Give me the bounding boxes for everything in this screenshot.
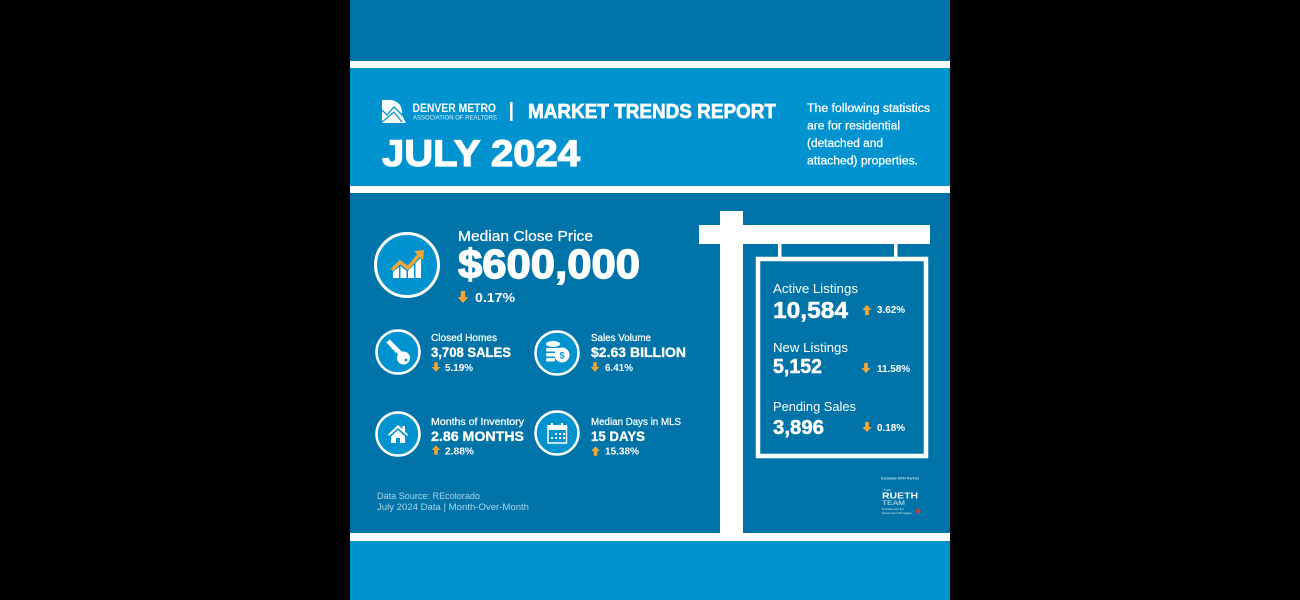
stat: sales volume — [536, 332, 686, 374]
new listings — [773, 340, 910, 378]
label: Sales Volume — [591, 333, 651, 344]
partner logo: Exclusive MTR Partner — [881, 476, 920, 480]
icon: Denver Metro logo — [381, 100, 406, 123]
label: Median Close Price — [458, 228, 593, 245]
text block: scope note — [807, 103, 930, 168]
icon: key — [376, 330, 420, 374]
pending sales: Pending Sales — [773, 399, 856, 414]
icon: down arrow — [591, 362, 599, 372]
new listings: 5,152 — [773, 356, 822, 378]
stat: closed homes — [376, 330, 511, 374]
pending sales: 0.18% — [877, 423, 905, 434]
change: 5.19% — [445, 363, 473, 374]
icon: up arrow — [591, 446, 600, 456]
change: 2.88% — [445, 446, 474, 458]
text block: scope note: (detached and — [807, 138, 883, 150]
active listings — [773, 281, 905, 323]
active listings: 10,584 — [773, 297, 848, 323]
text block: scope note: attached) properties. — [807, 156, 918, 168]
change: 15.38% — [605, 446, 639, 458]
divider — [510, 102, 513, 121]
text block: data source — [377, 491, 529, 513]
new listings: 11.58% — [877, 364, 910, 375]
text block: data source: July 2024 Data | Month-Over-Month — [377, 502, 529, 513]
logo wordmark: DENVER METRO — [412, 101, 496, 115]
label: Closed Homes — [431, 333, 497, 344]
icon: up arrow — [432, 445, 440, 455]
value: 15 DAYS — [591, 429, 645, 444]
partner logo: Powered by — [882, 507, 905, 511]
logo wordmark: ASSOCIATION OF REALTORS — [413, 114, 497, 122]
value: 2.86 MONTHS — [431, 429, 524, 444]
icon: down arrow — [432, 362, 440, 372]
partner logo: THE — [883, 488, 891, 492]
stat: median days in MLS — [536, 412, 681, 458]
sign post — [699, 211, 930, 533]
partner logo: RUETH — [882, 490, 918, 500]
change: 6.41% — [605, 363, 633, 374]
text block: scope note: The following statistics — [807, 103, 930, 115]
header band — [381, 100, 930, 174]
icon: coins — [536, 332, 578, 374]
new listings: New Listings — [773, 340, 849, 355]
partner logo: Movement Mortgage — [882, 511, 912, 515]
label: Months of Inventory — [431, 417, 524, 428]
icon: calendar — [536, 412, 578, 454]
icon: coins: $ — [559, 350, 565, 360]
pending sales — [773, 399, 905, 439]
change: 0.17% — [475, 290, 515, 305]
value: 3,708 SALES — [431, 345, 511, 360]
panel: listings sign — [758, 259, 926, 456]
text block: data source: Data Source: REcolorado — [377, 491, 480, 502]
value: $600,000 — [458, 241, 640, 287]
active listings: 3.62% — [877, 305, 905, 316]
heading: month: JULY 2024 — [382, 132, 580, 174]
value: $2.63 BILLION — [591, 345, 686, 360]
label: Median Days in MLS — [591, 417, 681, 428]
partner logo — [881, 476, 920, 515]
icon: house — [376, 412, 420, 456]
stat: months of inventory — [376, 412, 524, 458]
heading: report name: MARKET TRENDS REPORT — [528, 100, 776, 123]
icon: rising chart — [376, 234, 438, 296]
active listings: Active Listings — [773, 281, 859, 296]
pending sales: 3,896 — [773, 417, 824, 439]
logo wordmark — [412, 101, 497, 122]
partner logo: TEAM — [882, 501, 905, 507]
icon: down arrow — [458, 291, 468, 303]
text block: scope note: are for residential — [807, 120, 900, 132]
stat: median close price — [376, 228, 640, 305]
